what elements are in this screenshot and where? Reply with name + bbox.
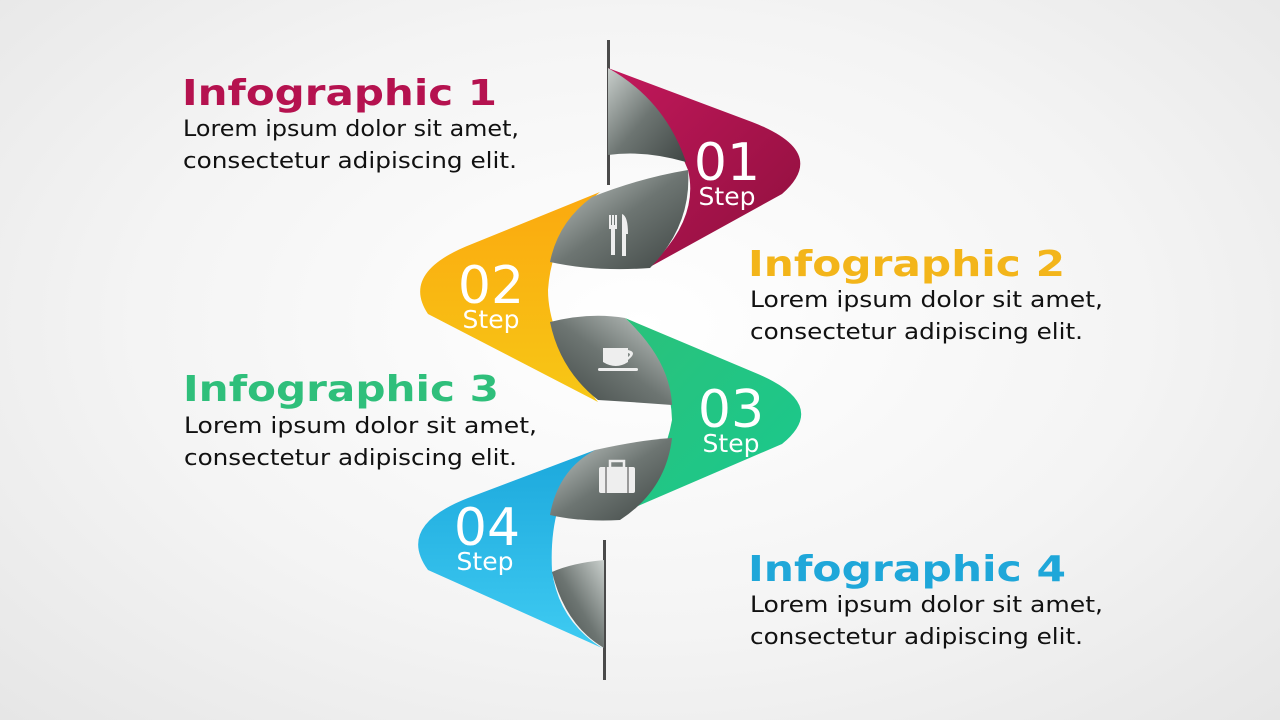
step number 01: 01 <box>694 133 760 193</box>
step number 03: 03 <box>698 380 764 440</box>
text block: Infographic 3: consectetur adipiscing elit. <box>184 446 517 471</box>
fold with briefcase icon <box>550 438 672 520</box>
step number 03: Step <box>703 429 759 458</box>
vertical line top <box>607 40 610 185</box>
icon: briefcase <box>599 461 635 493</box>
text block: Infographic 4: Lorem ipsum dolor sit amet, <box>750 593 1103 618</box>
icon: cup <box>598 348 638 371</box>
step number 04: 04 <box>454 498 520 558</box>
text block: Infographic 1: Lorem ipsum dolor sit amet, <box>183 117 519 142</box>
gray fold bottom <box>552 560 604 648</box>
text block: Infographic 2: Lorem ipsum dolor sit amet, <box>750 288 1103 313</box>
ribbon step 2 <box>420 192 600 402</box>
text block: Infographic 3 <box>183 369 537 471</box>
fold with fork and knife icon <box>550 170 688 269</box>
step number 02: 02 <box>458 256 524 316</box>
text block: Infographic 2: Infographic 2 <box>748 244 1065 285</box>
ribbon step 4 <box>418 450 604 648</box>
text block: Infographic 1 <box>182 73 519 174</box>
ribbon step 1 <box>608 68 800 268</box>
icon: fork and knife <box>609 214 628 256</box>
ribbon step 3 <box>610 318 801 518</box>
step number 04: Step <box>457 547 513 576</box>
text block: Infographic 4: consectetur adipiscing elit. <box>750 625 1083 650</box>
text block: Infographic 4 <box>748 549 1103 650</box>
text block: Infographic 2: consectetur adipiscing elit. <box>750 320 1083 345</box>
text block: Infographic 3: Infographic 3 <box>183 369 499 410</box>
fold with cup icon <box>550 316 672 405</box>
vertical line bottom <box>603 540 606 680</box>
step number 01: Step <box>699 182 755 211</box>
text block: Infographic 1: consectetur adipiscing elit. <box>183 149 517 174</box>
step number 02: Step <box>463 305 519 334</box>
text block: Infographic 3: Lorem ipsum dolor sit amet, <box>184 414 537 439</box>
text block: Infographic 2 <box>748 244 1103 345</box>
text block: Infographic 1: Infographic 1 <box>182 73 497 114</box>
text block: Infographic 4: Infographic 4 <box>748 549 1066 590</box>
gray fold top <box>608 68 686 162</box>
